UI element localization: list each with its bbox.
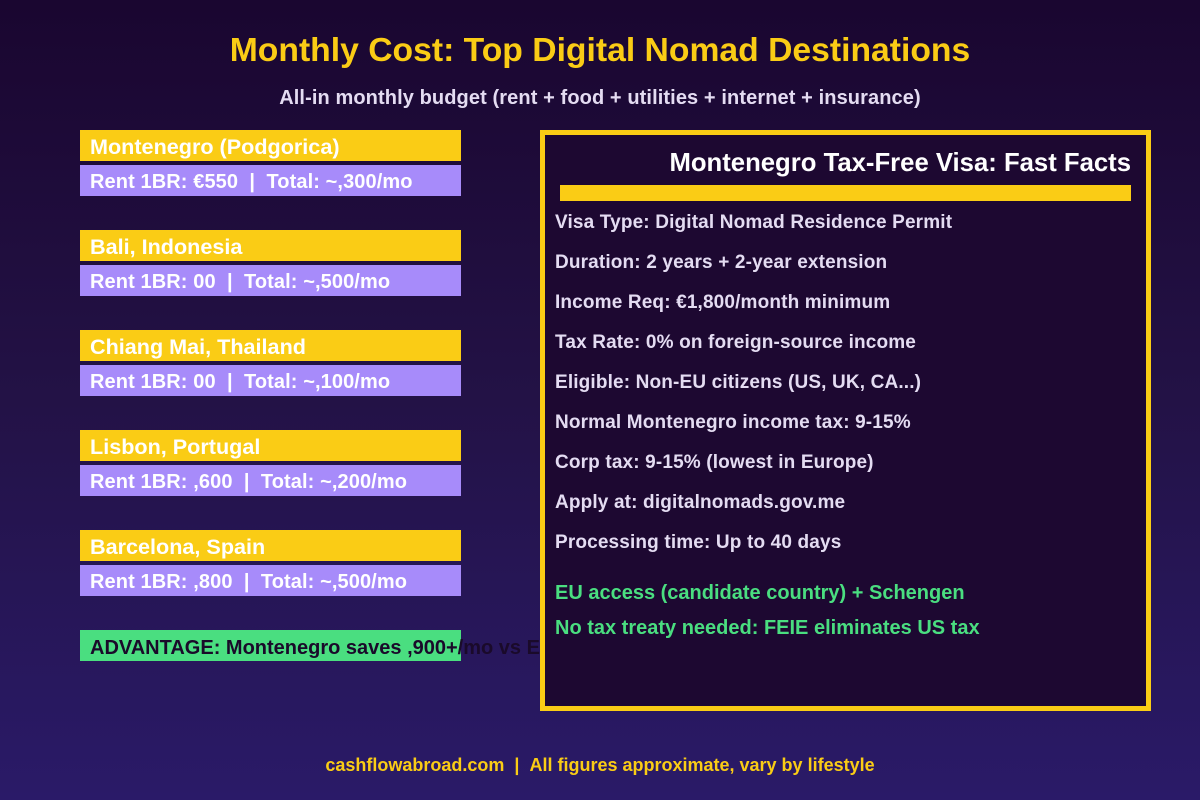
city: Chiang Mai <box>80 330 461 361</box>
cost: Lisbon: Rent 1BR: ,600 | Total: ~,200/mo <box>90 471 407 493</box>
city: Lisbon: Lisbon, Portugal <box>90 434 260 459</box>
cost: Lisbon <box>80 465 461 496</box>
facts list: No tax treaty needed: FEIE eliminates US tax <box>555 617 980 639</box>
cost: Chiang Mai <box>80 365 461 396</box>
city list <box>80 130 554 661</box>
cost: Barcelona: Rent 1BR: ,800 | Total: ~,500/mo <box>90 571 407 593</box>
city: Montenegro <box>80 130 461 161</box>
facts list: EU access (candidate country) + Schengen <box>555 582 965 604</box>
panel heading: Montenegro Tax-Free Visa: Fast Facts <box>669 149 1131 177</box>
cost: Bali: Rent 1BR: 00 | Total: ~,500/mo <box>90 271 390 293</box>
cost: Chiang Mai: Rent 1BR: 00 | Total: ~,100/mo <box>90 371 390 393</box>
advantage callout <box>80 630 461 661</box>
facts list: Corp tax: 9-15% (lowest in Europe) <box>555 452 874 473</box>
facts list: Normal Montenegro income tax: 9-15% <box>555 412 911 433</box>
cost: Barcelona <box>80 565 461 596</box>
facts list: Income Req: €1,800/month minimum <box>555 292 890 313</box>
facts list: Apply at: digitalnomads.gov.me <box>555 492 845 513</box>
facts list <box>555 212 980 639</box>
cost: Montenegro: Rent 1BR: €550 | Total: ~,300/mo <box>90 171 413 193</box>
city: Lisbon <box>80 430 461 461</box>
city: Chiang Mai: Chiang Mai, Thailand <box>90 334 306 359</box>
footer: cashflowabroad.com | All figures approximate, vary by lifestyle <box>325 755 875 775</box>
cost: Montenegro <box>80 165 461 196</box>
heading bar <box>560 185 1131 201</box>
subtitle: All-in monthly budget (rent + food + utilities + internet + insurance) <box>279 87 921 109</box>
city: Bali: Bali, Indonesia <box>90 234 242 259</box>
facts list: Tax Rate: 0% on foreign-source income <box>555 332 916 353</box>
title: Monthly Cost: Top Digital Nomad Destinations <box>230 31 970 69</box>
city: Bali <box>80 230 461 261</box>
city list: ADVANTAGE: Montenegro saves ,900+/mo vs EU <box>90 637 554 659</box>
city: Montenegro: Montenegro (Podgorica) <box>90 134 340 159</box>
facts list: Processing time: Up to 40 days <box>555 532 841 553</box>
city: Barcelona: Barcelona, Spain <box>90 534 265 559</box>
cost: Bali <box>80 265 461 296</box>
panel: visa fast facts <box>540 130 1151 711</box>
facts list: Visa Type: Digital Nomad Residence Permit <box>555 212 952 233</box>
facts list: Duration: 2 years + 2-year extension <box>555 252 887 273</box>
facts list: Eligible: Non-EU citizens (US, UK, CA...) <box>555 372 921 393</box>
city: Barcelona <box>80 530 461 561</box>
